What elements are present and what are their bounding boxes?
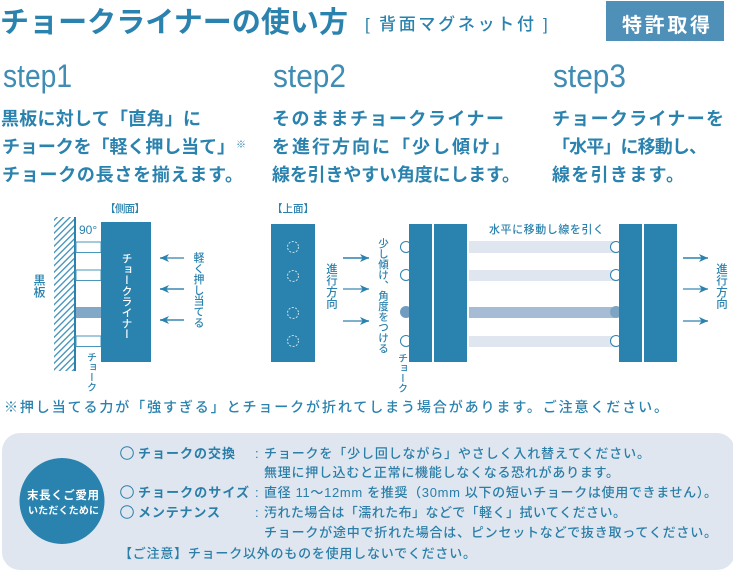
patent badge: 特許取得 [622, 14, 710, 37]
step 2 text: そのままチョークライナー [272, 109, 504, 129]
care list: : [255, 505, 259, 520]
step 1 text: チョークの長さを揃えます。 [2, 165, 243, 185]
step 1 text [1, 58, 246, 185]
step 1 text: step1 [3, 58, 72, 94]
step 2 text: 線を引きやすい角度にします。 [272, 165, 520, 185]
care list [119, 446, 717, 561]
step 2 text: を進行方向に「少し傾け」 [272, 136, 510, 157]
diagram: side view: 【側面】 [105, 202, 145, 215]
diagram: top view [271, 203, 369, 362]
badge: long use [20, 458, 104, 544]
step 2 text: step2 [273, 58, 346, 94]
panel: care instructions [2, 433, 733, 570]
care list: 汚れた場合は「濡れた布」などで「軽く」拭いてください。 [264, 505, 626, 520]
diagram: side view: チョークライナー [120, 253, 132, 339]
diagram: horizontal lines: 水平に移動し線を引く [489, 222, 604, 236]
step 1 text: ※ [236, 136, 246, 151]
diagram: side view: 黒板 [32, 274, 46, 299]
badge: long use: 末長くご愛用 [27, 488, 99, 502]
step 3 text [552, 58, 724, 185]
care list: チョークのサイズ [138, 485, 249, 500]
diagram: side view: 軽く押し当てる [192, 252, 204, 328]
step 3 text: step3 [553, 58, 626, 94]
care list: : [255, 485, 259, 500]
care list: : [255, 446, 259, 461]
step 1 text: チョークを「軽く押し当て」 [2, 137, 235, 157]
care list: 【ご注意】チョーク以外のものを使用しないでください。 [119, 546, 476, 561]
subtitle: magnet: ] [543, 15, 548, 34]
caution note: ※押し当てる力が「強すぎる」とチョークが折れてしまう場合があります。ご注意ください。 [4, 397, 668, 417]
diagram: top view: 進行方向 [325, 263, 338, 309]
diagram: top view: 【上面】 [272, 203, 314, 215]
title: チョークライナーの使い方 [0, 6, 348, 39]
diagram: move end [610, 224, 728, 362]
badge: long use: いただくために [28, 505, 99, 517]
diagram: move end: 進行方向 [715, 263, 728, 309]
care list: 無理に押し込むと正常に機能しなくなる恐れがあります。 [264, 465, 619, 480]
care list: チョークの交換 [138, 446, 235, 461]
patent badge [606, 1, 724, 41]
step 2 text [272, 58, 520, 185]
care list: チョークを「少し回しながら」やさしく入れ替えてください。 [264, 446, 650, 461]
care list: メンテナンス [138, 505, 220, 520]
diagram: side view: 90° [79, 223, 97, 237]
subtitle: magnet: 背面マグネット付 [379, 15, 534, 34]
step 3 text: チョークライナーを [552, 109, 724, 129]
step 3 text: 線を引きます。 [552, 165, 684, 185]
step 1 text: 黒板に対して「直角」に [1, 109, 201, 129]
diagram: tilt start: チョーク [396, 353, 408, 393]
diagram: tilt start [377, 224, 467, 393]
diagram: tilt start: 少し傾け、角度をつける [377, 237, 389, 354]
diagram: horizontal lines [469, 222, 615, 347]
care list: 直径 11～12mm を推奨（30mm 以下の短いチョークは使用できません）。 [264, 485, 717, 500]
diagram: side view: チョーク [84, 352, 96, 392]
diagram: side view [32, 202, 204, 392]
care list: チョークが途中で折れた場合は、ピンセットなどで抜き取ってください。 [264, 525, 717, 540]
step 3 text: 「水平」に移動し、 [552, 137, 707, 157]
subtitle: magnet: [ [365, 15, 370, 34]
